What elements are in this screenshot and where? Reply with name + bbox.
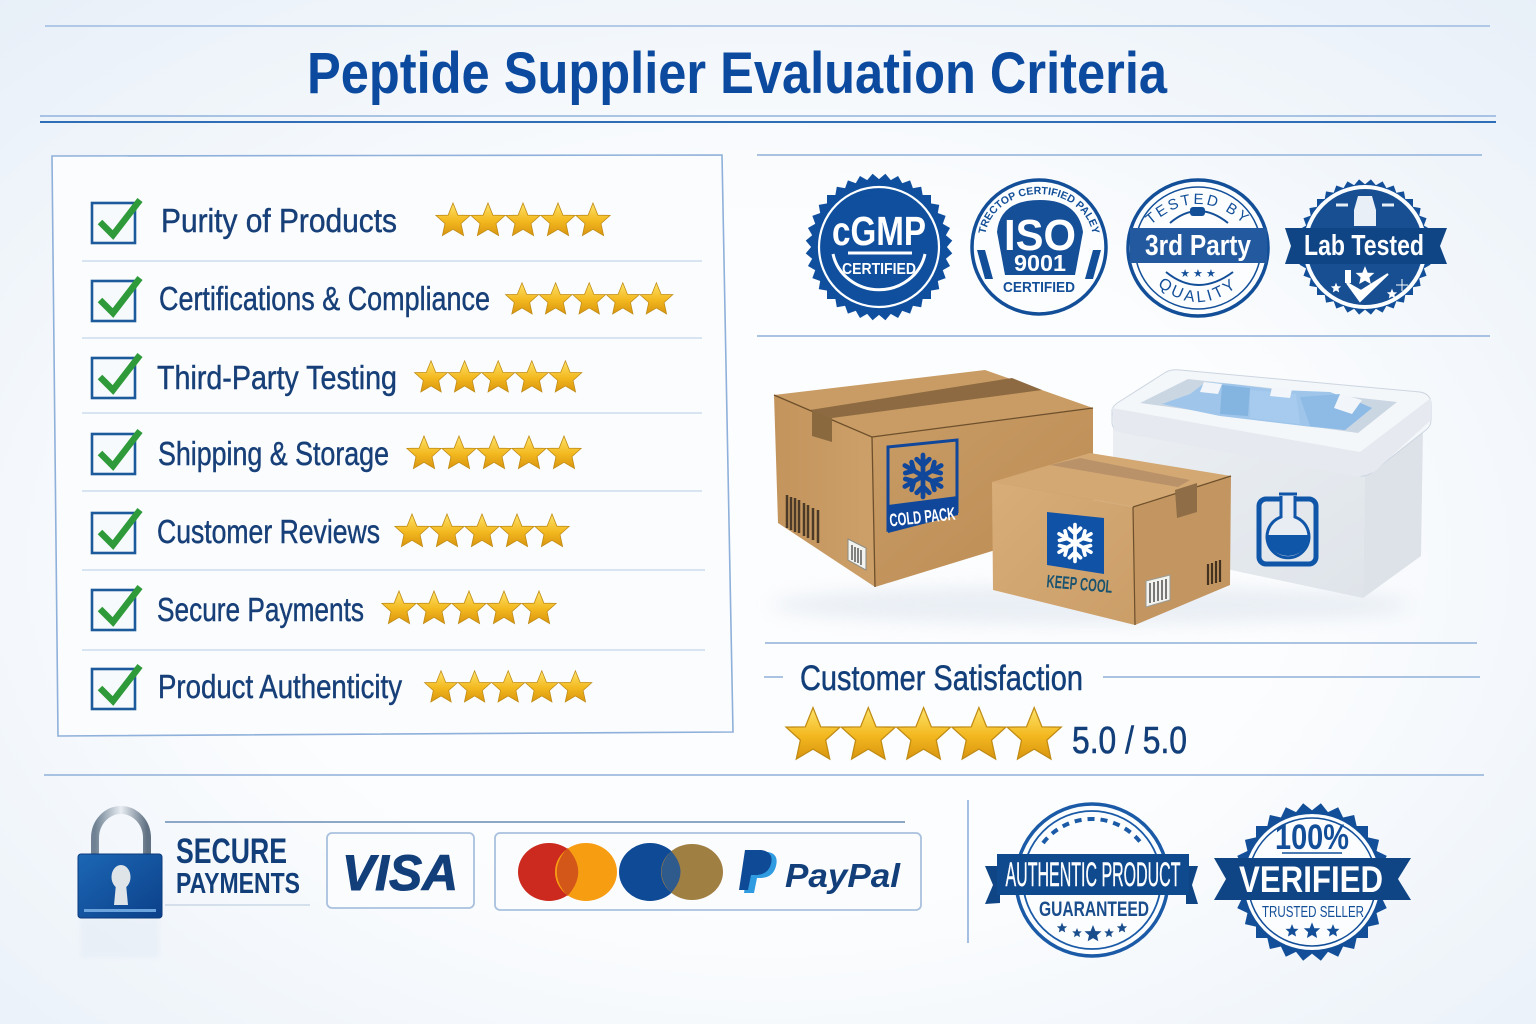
title: Peptide Supplier Evaluation Criteria [307, 41, 1168, 106]
card: mastercard, maestro and paypal [495, 833, 921, 910]
ice packs [1162, 382, 1372, 430]
badge: ISO 9001: ISO [1004, 211, 1076, 260]
row: third-party testing: Third-Party Testing [157, 359, 397, 396]
illustration: cold-chain packaging [770, 370, 1431, 625]
badge: 100% verified trusted seller: TRUSTED SELLER [1262, 904, 1364, 921]
badge: tested by 3rd party: TESTED BY [1144, 194, 1250, 223]
badge: tested by 3rd party: ★ ★ ★ [1180, 268, 1216, 280]
row: shipping and storage: Shipping & Storage [158, 435, 389, 472]
ground shadow [770, 585, 1410, 625]
row: secure payments: Secure Payments [157, 591, 364, 628]
row: product authenticity [92, 666, 592, 709]
secure payments label: SECURE [176, 832, 287, 871]
row: product authenticity: Product Authenticity [158, 668, 402, 705]
logo: red and orange circles [518, 843, 617, 901]
section: customer satisfaction: Customer Satisfaction [800, 659, 1083, 698]
row: certifications and compliance: Certifications & Compliance [159, 280, 490, 317]
badge: cGMP certified: cGMP [832, 208, 926, 254]
logo: blue and gold circles [619, 843, 723, 901]
panel: evaluation checklist [52, 155, 733, 736]
card: visa [327, 833, 474, 908]
logo: paypal: PayPal [785, 857, 901, 894]
badge: tested by 3rd party: QUALITY [1160, 278, 1232, 302]
badge: lab tested [1285, 179, 1447, 315]
secure payments label [176, 832, 300, 900]
bottom rules [165, 822, 905, 905]
badge: cGMP certified: CERTIFIED [842, 261, 916, 278]
secure payments label: PAYMENTS [176, 868, 300, 900]
badge: 100% verified trusted seller: 100% [1275, 818, 1349, 857]
large cardboard box: COLD PACK [889, 504, 956, 530]
rating value: 5.0 / 5.0 [1072, 720, 1187, 762]
badge: ISO 9001: CERTIFIED [1003, 279, 1075, 296]
badge: tested by 3rd party [1126, 178, 1270, 318]
section: customer satisfaction [764, 659, 1480, 762]
badge: authentic product guaranteed: GUARANTEED [1039, 898, 1149, 921]
header rule: top [45, 25, 1490, 27]
foam cooler with ice [1112, 370, 1431, 598]
section dividers [44, 155, 1490, 943]
small cardboard box [992, 453, 1231, 625]
row: shipping and storage [92, 431, 581, 474]
flask icon [1259, 494, 1316, 564]
icon: padlock [78, 810, 162, 958]
row: secure payments [92, 587, 556, 630]
badge: lab tested: Lab Tested [1304, 230, 1424, 262]
row: purity of products: Purity of Products [161, 202, 397, 239]
badge: cGMP certified [806, 174, 952, 320]
large cardboard box [774, 370, 1093, 587]
card: visa: VISA [342, 845, 458, 901]
badge: authentic product guaranteed: AUTHENTIC PRODUCT [1006, 856, 1180, 894]
row: certifications and compliance [92, 278, 673, 321]
badge: 100% verified trusted seller [1214, 803, 1411, 961]
row: purity of products [92, 200, 610, 243]
row: customer reviews [92, 510, 569, 553]
badge: ISO 9001: TRECTOP CERTIFIED PALEY [978, 186, 1100, 233]
logo: paypal [739, 850, 901, 894]
row: customer reviews: Customer Reviews [157, 513, 380, 550]
small cardboard box: KEEP COOL [1046, 571, 1113, 597]
badge: authentic product guaranteed [985, 804, 1198, 956]
badge: ISO 9001 [970, 178, 1108, 316]
badge: 100% verified trusted seller: VERIFIED [1239, 859, 1383, 900]
header rule: double [40, 116, 1496, 122]
badge: ISO 9001: 9001 [1014, 250, 1066, 276]
row: third-party testing [92, 355, 582, 398]
badge: tested by 3rd party: 3rd Party [1145, 230, 1251, 262]
rating stars [786, 708, 1061, 759]
